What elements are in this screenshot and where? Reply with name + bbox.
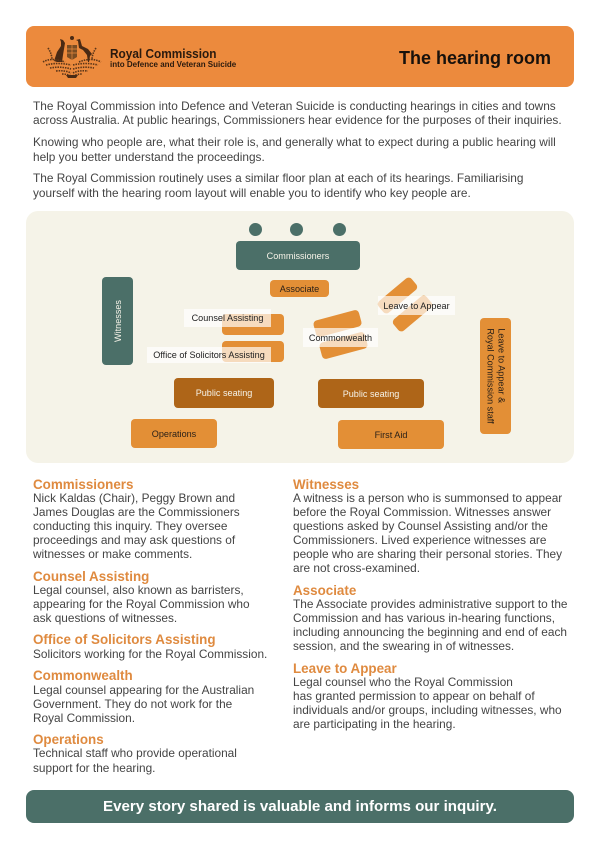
leave to appear and staff table: Leave to Appear & (497, 328, 507, 403)
witnesses definition: Commissioners. Lived experience witnesses are (293, 533, 546, 547)
counsel assisting table (222, 314, 284, 335)
operations definition: support for the hearing. (33, 761, 155, 775)
leave to appear definition (293, 661, 562, 731)
office of solicitors table (222, 341, 284, 362)
commonwealth definition: Legal counsel appearing for the Australian (33, 683, 254, 697)
office of solicitors definition: Office of Solicitors Assisting (33, 632, 216, 647)
intro text (33, 99, 562, 200)
associate definition: including announcing the beginning and end of each (293, 625, 567, 639)
footer banner: Every story shared is valuable and informs our inquiry. (103, 798, 497, 815)
intro text: yourself with the hearing room layout will enable you to identify who key people are. (33, 186, 471, 200)
logo wordmark: Royal Commission (110, 46, 216, 61)
commissioners table: Commissioners (267, 250, 329, 260)
intro text: across Australia. At public hearings, Commissioners hear evidence for the purposes of their inquiries. (33, 113, 562, 127)
office of solicitors definition (33, 632, 267, 661)
witnesses table (102, 277, 133, 365)
leave to appear label (378, 296, 455, 315)
intro text: The Royal Commission into Defence and Veteran Suicide is conducting hearings in cities and towns (33, 99, 556, 113)
counsel assisting label: Counsel Assisting (192, 313, 263, 323)
counsel assisting definition: ask questions of witnesses. (33, 611, 177, 625)
commonwealth label: Commonwealth (309, 332, 372, 342)
office of solicitors definition: Solicitors working for the Royal Commission. (33, 647, 267, 661)
office of solicitors label: Office of Solicitors Assisting (153, 350, 265, 360)
logo wordmark (110, 46, 236, 69)
commissioners definition: proceedings and may ask questions of (33, 533, 235, 547)
commonwealth definition (33, 668, 254, 725)
counsel assisting label (184, 309, 271, 327)
operations definition: Operations (33, 732, 104, 747)
first aid desk (338, 420, 444, 449)
public seating right (318, 379, 424, 408)
panel: floor plan (26, 211, 574, 463)
first aid desk: First Aid (375, 430, 407, 440)
witnesses definition: before the Royal Commission. Witnesses answer (293, 505, 551, 519)
footer banner (26, 790, 574, 823)
witnesses definition: A witness is a person who is summonsed to appear (293, 491, 562, 505)
commonwealth label (303, 328, 378, 347)
leave to appear definition: has granted permission to appear on behalf of (293, 689, 535, 703)
associate definition: session, and the swearing in of witnesses. (293, 639, 514, 653)
leave to appear label: Leave to Appear (383, 300, 450, 310)
leave to appear definition: are participating in the hearing. (293, 717, 456, 731)
witnesses definition: questions asked by Counsel Assisting and/or the (293, 519, 548, 533)
counsel assisting definition: Counsel Assisting (33, 569, 149, 584)
public seating left: Public seating (196, 388, 252, 398)
commissioners table (236, 241, 360, 270)
associate table: Associate (280, 284, 319, 294)
logo wordmark: into Defence and Veteran Suicide (110, 60, 236, 69)
commissioners definition: conducting this inquiry. They oversee (33, 519, 227, 533)
associate definition (293, 583, 568, 653)
witnesses table: Witnesses (113, 300, 123, 342)
commissioners definition: witnesses or make comments. (33, 547, 192, 561)
leave to appear definition: individuals and/or groups, including witnesses, who (293, 703, 562, 717)
counsel assisting definition (33, 569, 250, 625)
intro text: help you better understand the proceedings. (33, 150, 265, 164)
witnesses definition: are not cross-examined. (293, 561, 420, 575)
header banner (26, 26, 574, 87)
commissioners definition: Commissioners (33, 477, 133, 492)
leave to appear definition: Legal counsel who the Royal Commission (293, 675, 513, 689)
commissioners definition: Nick Kaldas (Chair), Peggy Brown and (33, 491, 235, 505)
associate table (270, 280, 329, 297)
intro text: Knowing who people are, what their role is, and generally what to expect during a public hearing will (33, 135, 556, 149)
left column (33, 477, 267, 775)
floor plan diagram (102, 223, 511, 449)
right column (293, 477, 568, 731)
operations definition (33, 732, 237, 775)
commissioners definition: James Douglas are the Commissioners (33, 505, 240, 519)
operations definition: Technical staff who provide operational (33, 746, 237, 760)
witnesses definition: Witnesses (293, 477, 359, 492)
leave to appear and staff table (480, 318, 511, 434)
operations desk: Operations (152, 428, 196, 438)
leave to appear tables (378, 278, 432, 332)
witnesses definition (293, 477, 562, 575)
counsel assisting definition: appearing for the Royal Commission who (33, 597, 250, 611)
commissioners definition (33, 477, 240, 561)
commonwealth definition: Royal Commission. (33, 711, 135, 725)
icon: coat of arms (42, 36, 102, 78)
commonwealth tables (314, 310, 368, 359)
witnesses definition: people who are sharing their personal stories. They (293, 547, 562, 561)
leave to appear and staff table: Royal Commission staff (486, 328, 496, 424)
associate definition: The Associate provides administrative support to the (293, 597, 568, 611)
intro text: The Royal Commission routinely uses a similar floor plan at each of its hearings. Familiarising (33, 171, 523, 185)
leave to appear definition: Leave to Appear (293, 661, 397, 676)
public seating right: Public seating (343, 388, 399, 398)
commonwealth definition: Commonwealth (33, 668, 133, 683)
associate definition: Commission and has various in-hearing functions, (293, 611, 555, 625)
commonwealth definition: Government. They do not work for the (33, 697, 232, 711)
title: The hearing room (399, 48, 551, 68)
associate definition: Associate (293, 583, 356, 598)
commissioner seats (249, 223, 346, 236)
public seating left (174, 378, 274, 408)
operations desk (131, 419, 217, 448)
office of solicitors label (147, 347, 271, 363)
counsel assisting definition: Legal counsel, also known as barristers, (33, 583, 244, 597)
